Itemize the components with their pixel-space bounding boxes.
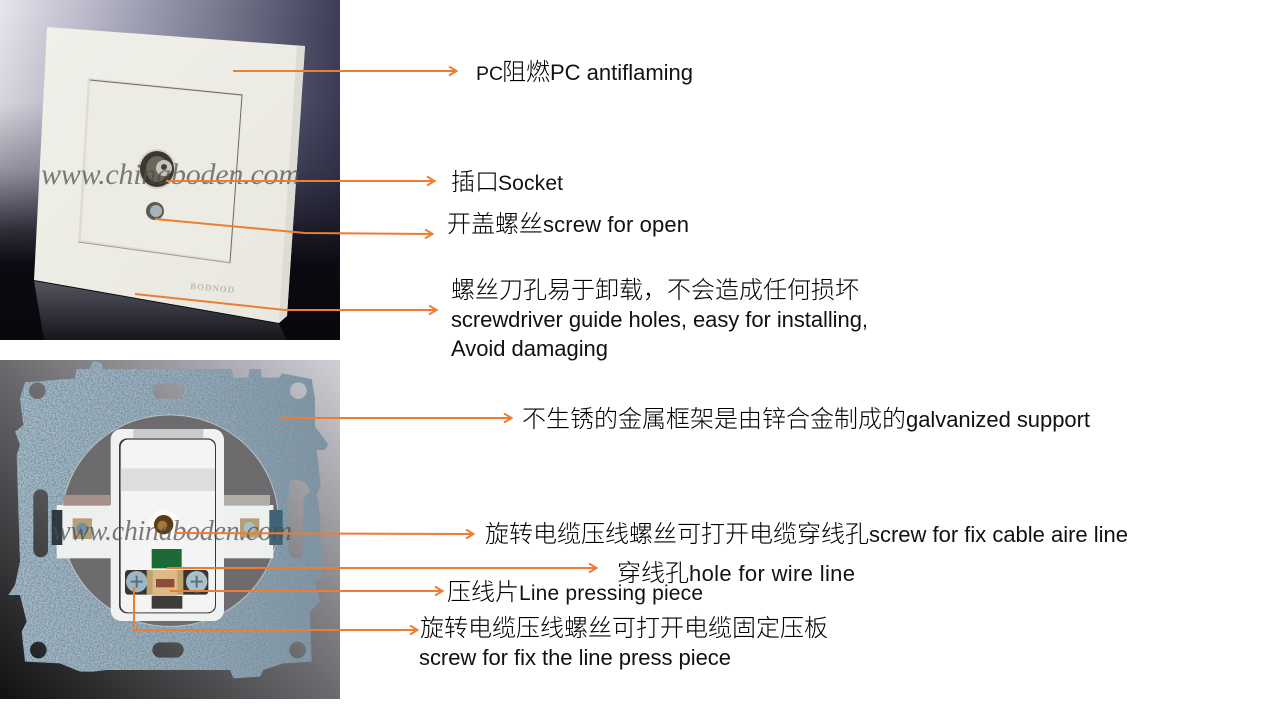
brand mark: BODNOD — [190, 281, 235, 295]
panel: photo of socket back — [0, 360, 340, 699]
arrow: screwdriver guide holes — [135, 294, 436, 310]
label: screwdriver guide holes: Avoid damaging — [451, 336, 608, 361]
label: line pressing piece: 压线片 — [447, 572, 519, 607]
label: screw for fix cable: screw for fix cable aire line — [869, 522, 1128, 547]
label: screw for open: 开盖螺丝 — [447, 204, 543, 239]
galvanized frame — [8, 361, 328, 678]
label: socket: Socket — [498, 172, 563, 195]
arrow: socket — [166, 180, 434, 182]
label: screw for open: screw for open — [543, 212, 689, 237]
label: screwdriver guide holes: 螺丝刀孔易于卸载，不会造成任何损坏 — [451, 270, 859, 305]
socket connector — [138, 149, 176, 189]
label: PC antiflaming: PC — [476, 63, 503, 85]
label: screwdriver guide holes — [451, 270, 868, 361]
arrow: line pressing piece — [170, 590, 442, 592]
open screw — [146, 202, 164, 220]
label: screw for line press piece: 旋转电缆压线螺丝可打开电缆固定压板 — [420, 608, 828, 643]
label: screw for fix cable — [485, 514, 1128, 549]
opening rim — [62, 415, 278, 626]
view through central opening — [62, 415, 278, 626]
label: line pressing piece — [447, 572, 703, 607]
label: screw for fix cable: 旋转电缆压线螺丝可打开电缆穿线孔 — [485, 514, 869, 549]
label: socket — [451, 162, 563, 197]
label: hole for wire line — [617, 553, 855, 588]
plate reflection — [34, 281, 287, 340]
label: PC antiflaming: PC antiflaming — [550, 60, 693, 85]
photo background — [0, 0, 340, 340]
label: galvanized support: 不生锈的金属框架是由锌合金制成的 — [522, 399, 906, 434]
label: galvanized support: galvanized support — [906, 407, 1090, 432]
label: socket: 插口 — [451, 162, 499, 197]
central module — [111, 429, 224, 621]
photo background — [0, 360, 340, 699]
arrow: hole for wire line — [167, 567, 596, 569]
label: hole for wire line: 穿线孔 — [617, 553, 689, 588]
side arms — [52, 495, 283, 558]
watermark: www.chinaboden.com — [41, 158, 300, 191]
panel: photo of socket front — [0, 0, 340, 340]
label: PC antiflaming — [476, 52, 693, 87]
label: galvanized support — [522, 399, 1090, 434]
arrow: screw for fix cable — [175, 533, 473, 534]
label: PC antiflaming: 阻燃 — [502, 52, 550, 87]
metal frame and module — [8, 361, 328, 678]
label: hole for wire line: hole for wire line — [689, 561, 855, 586]
green terminal and clamp — [125, 549, 208, 609]
arrow: PC antiflaming — [233, 70, 456, 72]
label: screwdriver guide holes: screwdriver guide holes, easy for installing, — [451, 307, 868, 332]
label: line pressing piece: Line pressing piece — [519, 582, 703, 605]
watermark: www.chinaboden.com — [52, 516, 292, 547]
arrow: screw for open — [155, 219, 432, 234]
arrow: galvanized support — [279, 417, 511, 419]
arrow: screw for line press piece — [134, 587, 417, 630]
label: screw for line press piece: screw for fix the line press piece — [419, 645, 731, 670]
wall plate — [34, 27, 305, 323]
label: screw for open — [447, 204, 689, 239]
label: screw for line press piece — [419, 608, 828, 670]
